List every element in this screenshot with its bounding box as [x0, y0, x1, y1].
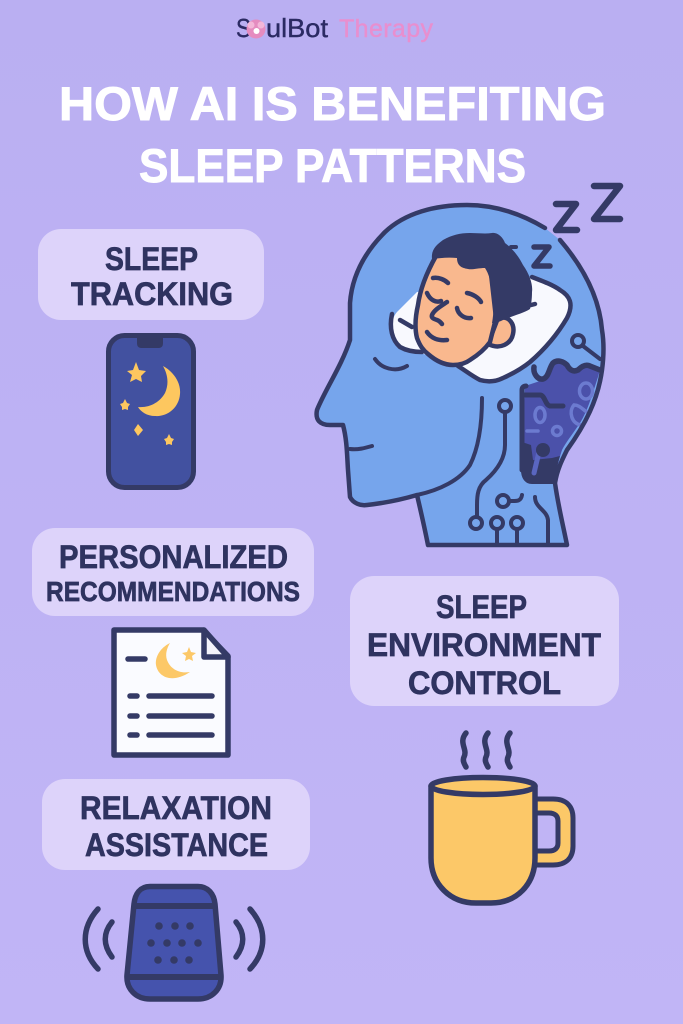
pillow [391, 277, 571, 381]
icon: smart speaker with sound waves [85, 886, 263, 999]
panel: personalized recommendations: RECOMMENDATIONS [46, 576, 300, 607]
title: HOW AI IS BENEFITING [59, 77, 606, 130]
icon: phone with moon and stars [108, 336, 194, 488]
ear [488, 317, 513, 346]
panel: relaxation assistance [42, 779, 310, 870]
panel: sleep environment control: ENVIRONMENT [367, 627, 601, 663]
hair [432, 233, 532, 323]
panel: sleep environment control: CONTROL [408, 665, 561, 701]
logo word: ulBot: ulBot [266, 13, 329, 43]
panel: sleep environment control: SLEEP [436, 589, 527, 625]
panel: personalized recommendations [32, 528, 314, 616]
sleep Z letters [511, 186, 620, 266]
panel: sleep tracking: SLEEP [105, 241, 198, 277]
panel: relaxation assistance: ASSISTANCE [85, 827, 268, 863]
illustration: sleeping AI head [317, 186, 620, 545]
facial features [427, 278, 481, 340]
title [59, 77, 606, 192]
closed eye and mouth on head profile [350, 359, 407, 449]
icon: steaming mug [431, 733, 573, 903]
title: SLEEP PATTERNS [139, 139, 526, 192]
head outline [317, 205, 604, 545]
icon: brain logo [246, 20, 266, 38]
circuit brain patch [521, 361, 600, 484]
panel: sleep tracking [38, 229, 264, 320]
logo: SoulBot Therapy: S [236, 13, 251, 43]
panel: sleep environment control [350, 576, 619, 706]
logo word: Therapy: Therapy [339, 15, 434, 43]
head silhouette [317, 205, 604, 545]
icon: document with moon [114, 630, 228, 755]
logo: SoulBot Therapy [236, 13, 434, 43]
jaw and circuit traces [417, 335, 600, 545]
face [416, 245, 496, 365]
panel: personalized recommendations: PERSONALIZED [59, 539, 288, 575]
panel: sleep tracking: TRACKING [71, 276, 233, 312]
panel: relaxation assistance: RELAXATION [80, 790, 272, 826]
